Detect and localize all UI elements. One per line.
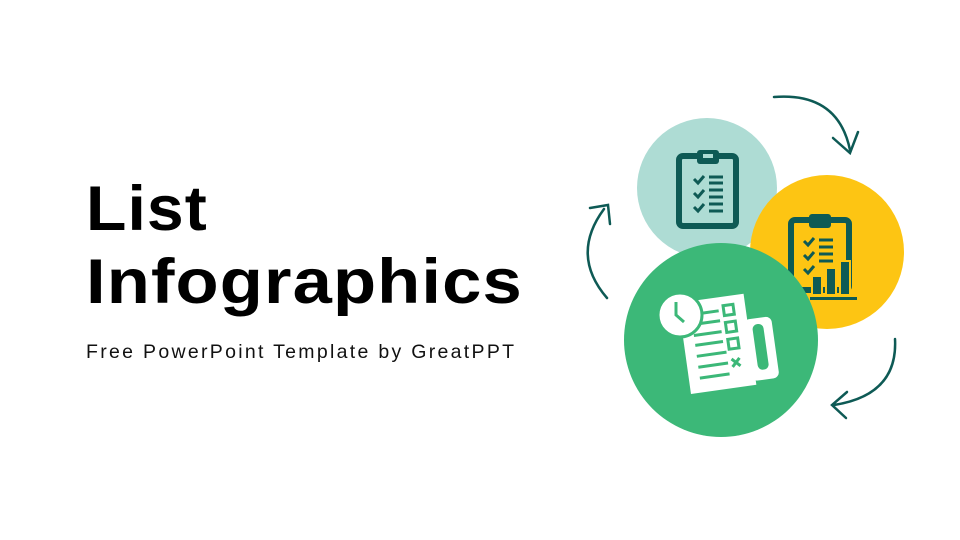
subtitle: Free PowerPoint Template by GreatPPT [86, 341, 516, 363]
title: Infographics [86, 247, 523, 317]
arrow: left [588, 205, 610, 298]
icon: clipboard with chart [791, 214, 857, 300]
icon: clipboard [679, 150, 736, 226]
title [86, 174, 523, 317]
circle: teal [637, 118, 777, 258]
arrow: top [774, 97, 858, 153]
circle: green [624, 243, 818, 437]
circle: yellow [750, 175, 904, 329]
icon: document with clock [678, 290, 780, 394]
title: List [86, 174, 208, 244]
arrow: bottom right [832, 339, 895, 418]
